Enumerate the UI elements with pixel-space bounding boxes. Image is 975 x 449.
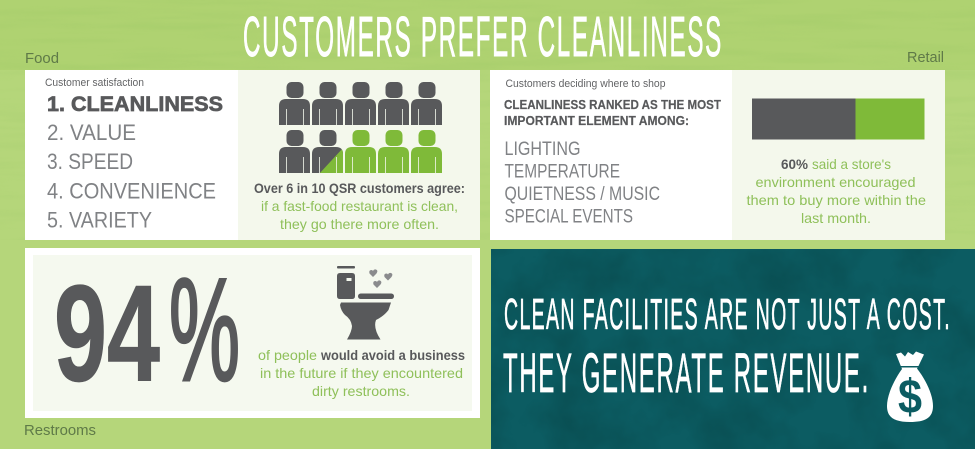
icon: people pictogram [279,82,442,173]
retail list: SPECIAL EVENTS [504,206,633,228]
retail caption: environment encouraged [756,174,916,190]
restroom caption: would avoid a business [320,347,465,363]
ranked list: 1. CLEANLINESS [47,93,223,116]
icon: money bag [887,352,933,424]
retail heading: Customers deciding where to shop [506,78,666,90]
restroom caption: of people [258,347,317,363]
restroom caption: in the future if they encountered [260,365,463,381]
food caption: if a fast-food restaurant is clean, [261,198,458,214]
retail caption: them to buy more within the [746,192,926,208]
big number: 94 percent: 94 [54,258,160,410]
retail list: TEMPERATURE [504,162,620,182]
food list heading: Customer satisfaction [45,77,144,89]
retail caption: last month. [801,210,871,226]
label: Retail: Retail [907,50,944,66]
ranked list: 4. CONVENIENCE [47,178,216,204]
retail list: QUIETNESS / MUSIC [504,184,660,205]
retail subheading: IMPORTANT ELEMENT AMONG: [504,114,689,128]
panel: food [25,70,480,240]
retail caption: said a store's [812,156,891,172]
retail caption [746,156,926,226]
icon: toilet [337,266,394,340]
restroom caption: dirty restrooms. [312,383,410,399]
food caption: Over 6 in 10 QSR customers agree: [254,180,465,196]
retail subheading: CLEANLINESS RANKED AS THE MOST [504,98,721,112]
retail subheading [504,98,721,128]
icon: money bag: $ [898,371,922,424]
ranked list: 5. VARIETY [47,208,152,232]
food caption: they go there more often. [280,216,439,232]
food caption [254,180,465,232]
icon: odor hearts [369,269,392,288]
panel: revenue message [491,249,975,449]
ranked list [47,93,223,232]
bar: 60 percent [752,98,924,140]
label: Food: Food [25,51,59,67]
panel: retail [490,70,945,240]
label: Restrooms: Restrooms [24,423,96,439]
retail list: LIGHTING [504,139,580,160]
panel: restrooms [25,248,480,418]
ranked list: 2. VALUE [47,120,136,145]
restroom caption [258,347,465,399]
big number: 94 percent: % [169,248,240,411]
ranked list: 3. SPEED [47,149,133,174]
retail caption: 60% [781,156,809,172]
retail list [504,139,660,228]
